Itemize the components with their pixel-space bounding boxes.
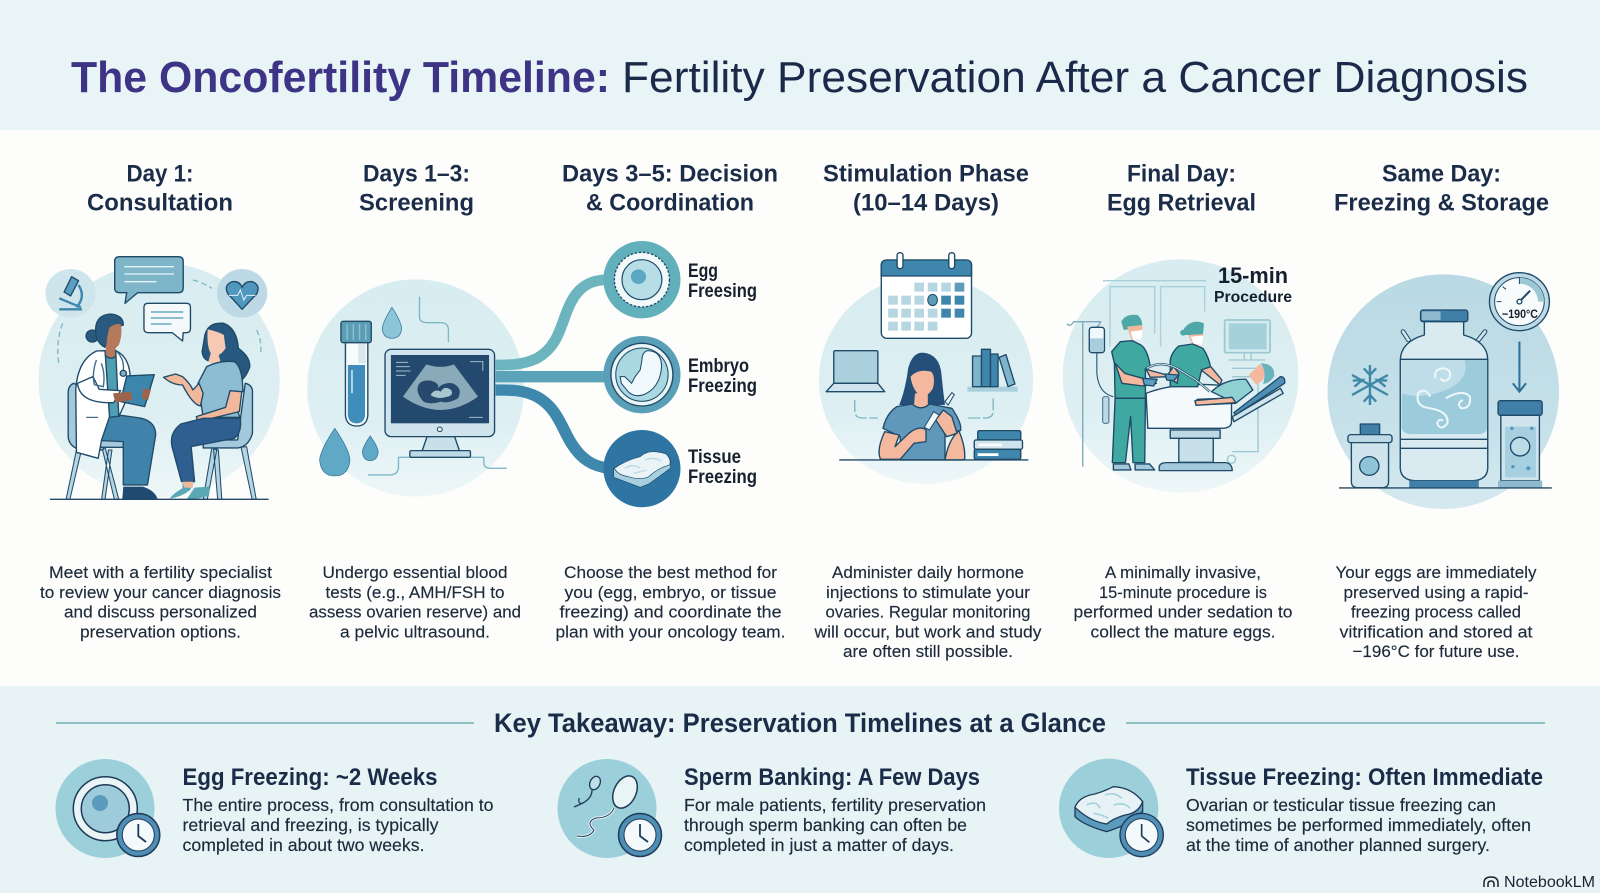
icon: ultrasound monitor [385, 349, 495, 457]
icon: laptop [826, 351, 885, 392]
option labels: Freezing [688, 376, 757, 397]
card: tissue freezing: sometimes be performed immediately, often [1186, 815, 1531, 835]
title [71, 53, 1528, 102]
bed [1146, 377, 1285, 471]
step 1 heading: Consultation [87, 190, 233, 216]
patient's chair [203, 383, 256, 499]
floor line [50, 497, 269, 501]
step 1 heading [87, 160, 233, 216]
description: retrieval: A minimally invasive, [1105, 563, 1261, 582]
instrument [1147, 364, 1210, 392]
description: decision: Choose the best method for [564, 563, 777, 582]
description: retrieval: performed under sedation to [1074, 602, 1292, 622]
callout: 15-min procedure: Procedure [1214, 289, 1292, 306]
icon: dewar tank [1400, 310, 1488, 488]
step 3 heading [562, 160, 778, 216]
patient [164, 323, 250, 499]
step 2 heading: Days 1–3: [363, 160, 470, 188]
step 4 heading [823, 160, 1029, 216]
title: The Oncofertility Timeline: [71, 53, 610, 102]
person with injection pen [879, 353, 965, 460]
step 2 heading: Screening [359, 190, 474, 216]
speech bubble: large [115, 257, 183, 303]
description: freezing: vitrification and stored at [1340, 622, 1533, 642]
option labels: Freezing [688, 467, 757, 488]
illustration: stimulation [819, 253, 1033, 484]
illustration: freezing and storage [1328, 273, 1559, 509]
step 3 heading: Days 3–5: Decision [562, 160, 778, 188]
card: sperm banking [684, 764, 986, 855]
surgeon right [1167, 322, 1222, 387]
gauge reading: −190°C [1502, 307, 1538, 321]
card: sperm banking: For male patients, fertility preservation [684, 795, 986, 815]
step 4 heading: (10–14 Days) [853, 190, 999, 216]
description: screening: Undergo essential blood [322, 563, 508, 582]
circuit lines [369, 297, 506, 475]
description: freezing [1336, 563, 1537, 661]
description: consultation [40, 563, 281, 642]
option labels: Egg [688, 261, 718, 282]
card: tissue freezing [1186, 764, 1543, 855]
icon: tissue with clock [1059, 759, 1163, 858]
option labels: Embryo [688, 356, 749, 377]
icon: NotebookLM logo [1484, 877, 1498, 887]
takeaway heading: Key Takeaway: Preservation Timelines at a Glance [494, 708, 1106, 738]
description: stimulation: are often still possible. [843, 642, 1013, 661]
doctor's chair [66, 383, 124, 499]
step 6 heading [1334, 160, 1549, 216]
card: egg freezing: completed in about two weeks. [182, 835, 424, 855]
card: sperm banking: completed in just a matter of days. [684, 835, 954, 855]
callout: 15-min procedure: 15-min [1218, 263, 1288, 288]
description: decision: plan with your oncology team. [556, 622, 786, 642]
description: stimulation [813, 563, 1042, 661]
title: Fertility Preservation After a Cancer Diagnosis [622, 53, 1528, 102]
description: stimulation: ovaries. Regular monitoring [826, 602, 1030, 622]
floor line [1339, 486, 1552, 490]
step 5 heading: Egg Retrieval [1107, 190, 1256, 216]
description: stimulation: will occur, but work and study [813, 622, 1042, 642]
description: consultation: to review your cancer diagnosis [40, 583, 281, 602]
header band [0, 0, 1600, 130]
description: freezing: preserved using a rapid- [1344, 583, 1528, 602]
icon: microscope [45, 269, 96, 318]
option labels: Tissue [688, 447, 741, 468]
icons: options [603, 241, 681, 507]
description: consultation: preservation options. [80, 622, 241, 642]
step 6 heading: Freezing & Storage [1334, 190, 1549, 216]
description: retrieval [1074, 563, 1292, 642]
description: stimulation: Administer daily hormone [832, 563, 1024, 582]
description: decision: freezing) and coordinate the [560, 602, 782, 622]
callout: 15-min procedure [1214, 263, 1292, 306]
illustration: screening [307, 279, 524, 497]
takeaway divider left [56, 722, 474, 724]
option labels: Freesing [688, 281, 757, 302]
icon: small jar [1348, 424, 1392, 488]
icon: storage vial [1498, 401, 1542, 488]
description: retrieval: 15-minute procedure is [1099, 583, 1267, 602]
step 5 heading [1107, 160, 1256, 216]
icon: monitor [1225, 320, 1270, 463]
icon: heart [217, 269, 267, 318]
icon: thermometer gauge [1489, 273, 1549, 331]
option labels [688, 261, 757, 488]
branch connectors [496, 279, 609, 468]
card: tissue freezing: Tissue Freezing: Often Immediate [1186, 764, 1543, 791]
card: sperm banking: through sperm banking can often be [684, 815, 967, 835]
illustration: consultation [39, 257, 280, 499]
icon: book stack [974, 431, 1022, 459]
description: stimulation: injections to stimulate your [826, 583, 1030, 602]
icon: tissue [603, 430, 681, 507]
description: screening [309, 563, 521, 642]
dashed links [58, 280, 261, 366]
icon: IV drip [1067, 322, 1113, 467]
watermark: NotebookLM [1504, 874, 1595, 891]
description: freezing: Your eggs are immediately [1336, 563, 1537, 582]
arrow down [1513, 342, 1526, 392]
dashed links [855, 398, 993, 418]
step 3 heading: & Coordination [586, 190, 754, 216]
description: decision [556, 563, 786, 642]
surgeon left [1112, 315, 1179, 470]
icon: drops [320, 307, 402, 476]
icon: snowflake [1352, 365, 1388, 405]
card: tissue freezing: Ovarian or testicular tissue freezing can [1186, 795, 1496, 815]
doctor [76, 314, 158, 499]
patient [1195, 363, 1274, 405]
takeaway divider right [1126, 722, 1545, 724]
description: screening: a pelvic ultrasound. [340, 622, 490, 642]
step 1 heading: Day 1: [126, 160, 194, 188]
step 5 heading: Final Day: [1127, 160, 1236, 188]
icon: sperm with clock [558, 759, 662, 858]
card: egg freezing [182, 764, 494, 855]
description: screening: assess ovarien reserve) and [309, 602, 521, 622]
description: decision: you (egg, embryo, or tissue [564, 583, 776, 602]
icon: test tube [341, 321, 371, 426]
icon: egg [603, 241, 681, 318]
description: retrieval: collect the mature eggs. [1090, 622, 1276, 642]
description: freezing: −196°C for future use. [1352, 642, 1520, 661]
desk line [839, 458, 1028, 462]
card: egg freezing: retrieval and freezing, is typically [182, 815, 439, 835]
card: sperm banking: Sperm Banking: A Few Days [684, 764, 980, 791]
card: egg freezing: Egg Freezing: ~2 Weeks [182, 764, 438, 791]
description: consultation: and discuss personalized [64, 602, 257, 622]
icon: embryo [603, 336, 681, 413]
illustration: retrieval [1063, 259, 1298, 493]
description: consultation: Meet with a fertility specialist [49, 563, 272, 582]
icon: calendar [881, 253, 972, 338]
speech bubble: small [144, 303, 190, 341]
wall panels [1103, 281, 1206, 347]
icon: bookshelf [967, 349, 1018, 392]
step 6 heading: Same Day: [1382, 160, 1501, 188]
card: egg freezing: The entire process, from consultation to [182, 795, 494, 815]
description: screening: tests (e.g., AMH/FSH to [326, 583, 504, 602]
icon: egg with clock [56, 759, 160, 858]
card: tissue freezing: at the time of another planned surgery. [1186, 835, 1490, 855]
step 4 heading: Stimulation Phase [823, 160, 1029, 188]
description: freezing: freezing process called [1351, 602, 1521, 622]
step 2 heading [359, 160, 474, 216]
takeaway band [0, 686, 1600, 893]
